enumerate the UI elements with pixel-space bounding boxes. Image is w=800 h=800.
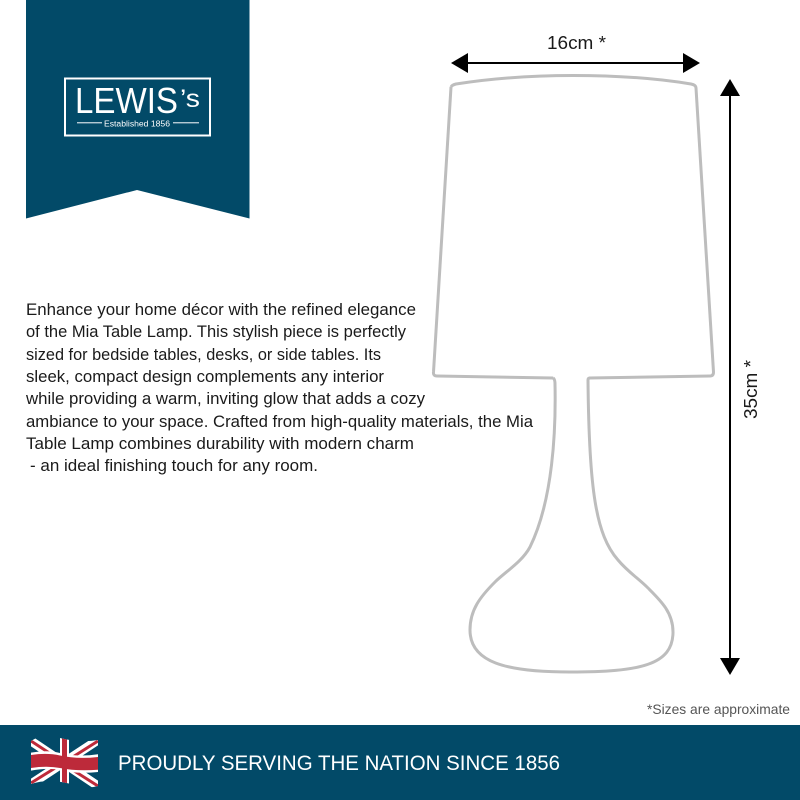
approximate sizes note: *Sizes are approximate (647, 701, 790, 717)
lamp shade (433, 76, 714, 378)
product description text: while providing a warm, inviting glow that adds a cozy (25, 390, 426, 408)
logo: Lewis's: Established 1856 (104, 120, 171, 128)
width arrow: 16cm (451, 33, 700, 73)
footer slogan: PROUDLY SERVING THE NATION SINCE 1856 (118, 752, 560, 775)
product description text: ambiance to your space. Crafted from high-quality materials, the Mia (26, 413, 534, 431)
height arrow: 35cm (720, 79, 761, 675)
logo: Lewis's: LEWIS (75, 80, 178, 121)
icon: union flag (31, 738, 98, 788)
footer bar (0, 725, 800, 800)
product description text: of the Mia Table Lamp. This stylish piece is perfectly (26, 323, 407, 341)
logo: Lewis's (65, 78, 210, 136)
banner with logo (26, 0, 250, 218)
product description text: Table Lamp combines durability with modern charm (26, 435, 414, 453)
product description text: Enhance your home décor with the refined elegance (26, 301, 416, 319)
lamp outline (433, 76, 714, 672)
product description text: sized for bedside tables, desks, or side tables. Its (26, 346, 381, 364)
logo: Lewis's: ’s (180, 85, 200, 113)
product description text (25, 301, 534, 475)
lamp base (470, 378, 673, 672)
width arrow: 16cm: 16cm * (547, 33, 606, 53)
height arrow: 35cm: 35cm * (741, 360, 761, 419)
product description text: sleek, compact design complements any interior (26, 368, 385, 386)
product description text: - an ideal finishing touch for any room. (30, 457, 318, 475)
